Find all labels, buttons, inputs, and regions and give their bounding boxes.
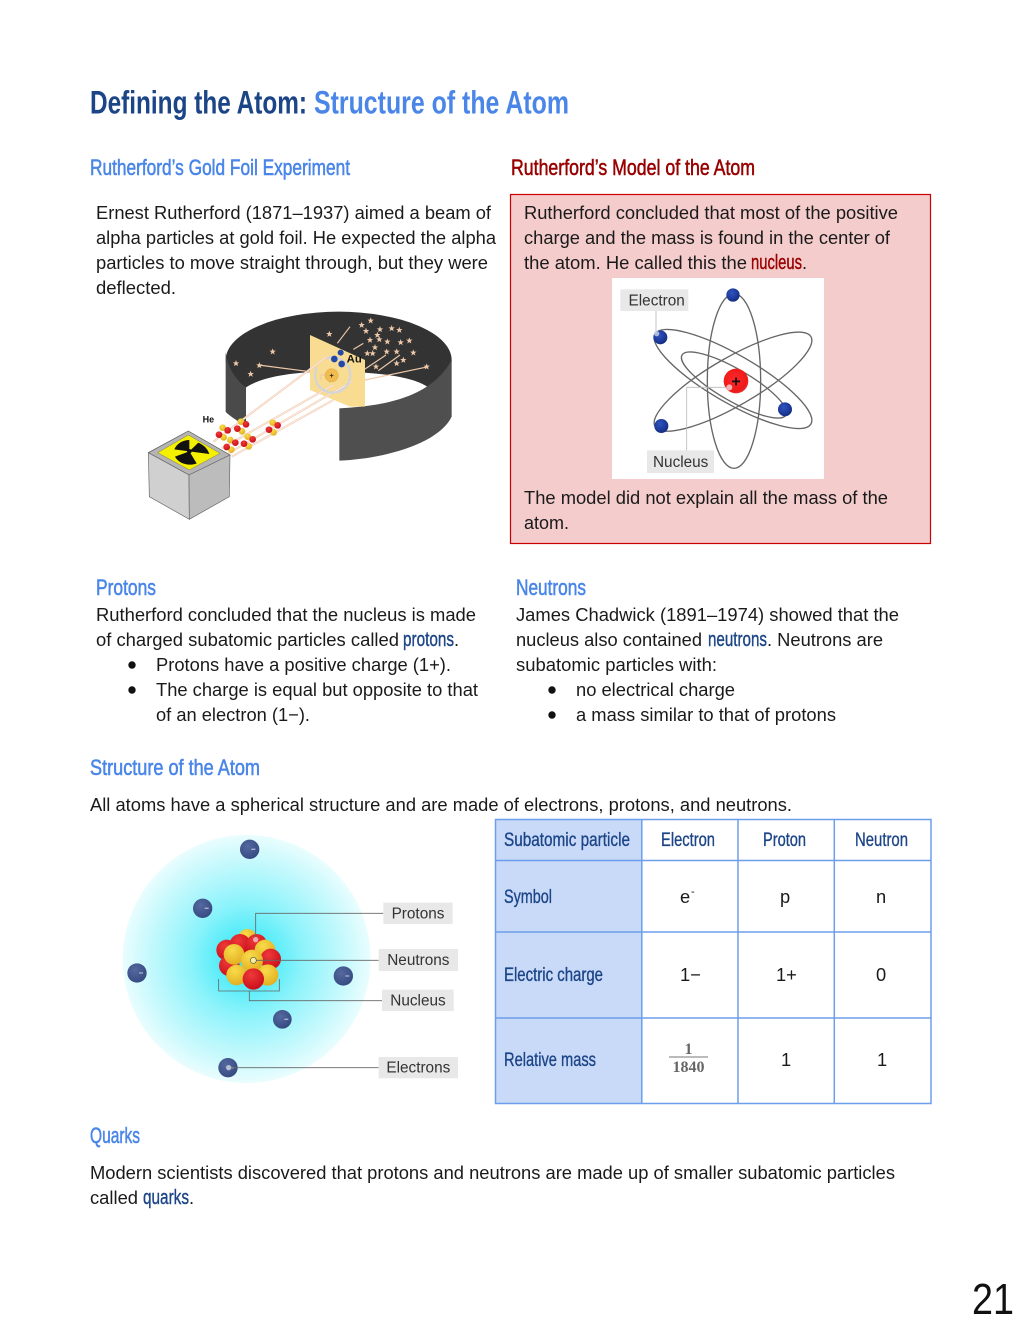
table header row: Subatomic particle [504,829,630,851]
panel text: limitation: atom. [524,512,569,533]
scattered stars [233,317,430,377]
panel: Rutherford's model [510,194,930,544]
text: neutrons intro [516,604,899,675]
text: quarks [90,1162,895,1209]
text: neutrons intro: . Neutrons are [767,629,883,650]
label: Nucleus: Nucleus [390,992,446,1009]
label: Protons [383,903,453,924]
row: electric charge: 1+ [776,964,797,985]
label: Nucleus: Nucleus [653,454,709,471]
text: quarks: called [90,1187,138,1208]
section: protons [96,575,478,725]
text block: gold foil experiment: Ernest Rutherford (1871–1937) aimed a beam of [96,202,492,223]
label: Electrons [379,1057,458,1078]
label: Au: Au [347,354,362,366]
row: electric charge: Electric charge [504,964,603,986]
row: relative mass: Relative mass [504,1049,596,1071]
row: electric charge: 0 [876,964,886,985]
row: relative mass: 1 [877,1049,887,1070]
gold nucleus [325,369,338,382]
bullet list: neutrons: no electrical charge [576,679,735,700]
table header row: Neutron [855,829,908,851]
alpha particles [216,418,281,453]
table header row: Electron [661,829,715,851]
right wall of the screen [339,360,452,461]
text: protons intro: protons [403,628,454,651]
nucleus with plus sign [724,369,748,393]
orbits [643,294,823,468]
nucleus cluster [216,929,281,990]
electron cloud [123,835,371,1083]
row: relative mass: 1 [781,1049,791,1070]
row: electric charge: 1− [680,964,701,985]
table header row [504,829,908,851]
table: subatomic particles [496,820,931,1104]
bullet list: protons [128,654,478,725]
bullet list: protons: The charge is equal but opposite to that [156,679,478,700]
text block: gold foil experiment: alpha particles at gold foil. He expected the alpha [96,227,497,248]
row: relative mass [504,1041,887,1076]
text block: gold foil experiment: deflected. [96,277,176,298]
label: Electron: Electron [629,292,685,309]
table grid [496,820,931,1104]
alpha particle tracks [213,327,428,457]
text: neutrons intro: neutrons [708,628,767,651]
panel text: conclusion: the atom. He called this the [524,252,747,273]
text: protons intro [96,604,476,651]
section: neutrons [516,575,899,725]
title: Structure of the Atom [314,84,569,120]
bullet list: protons: of an electron (1−). [156,704,310,725]
text: quarks: quarks [143,1186,189,1209]
row: electric charge [504,964,886,986]
label: Neutrons: Neutrons [387,952,450,969]
illustration: gold foil experiment [148,312,452,519]
panel text: limitation [524,487,888,533]
atom model diagram: + [731,374,741,391]
panel text: conclusion: nucleus [751,251,802,274]
left wall of the screen [226,352,246,426]
text block: gold foil experiment [96,202,497,298]
leader lines [656,308,729,451]
electrons [653,288,792,433]
label: Neutrons [379,949,458,971]
heading: model of the atom: Rutherford’s Model of the Atom [511,155,755,180]
fraction: 1/1840: 1840 [672,1059,704,1076]
text: structure intro: All atoms have a spherical structure and are made of electrons, protons, and neutrons. [90,794,792,815]
text: quarks: . [189,1187,194,1208]
electron orbit [315,357,350,393]
label: Electrons: Electrons [386,1059,451,1076]
bullet list: neutrons [548,679,836,725]
text: protons intro: Rutherford concluded that the nucleus is made [96,604,476,625]
text: neutrons intro: subatomic particles with: [516,654,717,675]
label: Electron [620,289,688,311]
label: Protons: Protons [392,905,445,922]
panel text: conclusion: . [802,252,807,273]
text: protons intro: . [454,629,459,650]
bullet list: neutrons: a mass similar to that of protons [576,704,836,725]
text: neutrons intro: nucleus also contained [516,629,702,650]
row: symbol [504,886,886,908]
bullet list: protons: Protons have a positive charge (1+). [156,654,451,675]
label: Nucleus [647,450,714,473]
label: He: He [203,415,214,425]
text: quarks: Modern scientists discovered that protons and neutrons are made up of smaller subatomic particles [90,1162,895,1183]
heading: gold foil experiment: Rutherford’s Gold Foil Experiment [90,155,350,180]
radioactive source box [148,431,230,519]
gold foil sheet [310,335,365,407]
row: symbol: - [691,886,695,898]
row: symbol: Symbol [504,886,552,908]
heading: structure of the atom: Structure of the Atom [90,755,260,780]
atom structure diagram [123,835,458,1083]
text: neutrons intro: James Chadwick (1891–1974) showed that the [516,604,899,625]
panel text: conclusion: Rutherford concluded that most of the positive [524,202,898,223]
row: symbol: p [780,886,790,907]
fraction: 1/1840 [669,1041,708,1076]
fraction: 1/1840: 1 [684,1041,692,1058]
text: protons intro: of charged subatomic particles called [96,629,399,650]
label: Nucleus [382,990,454,1011]
panel text: limitation: The model did not explain all the mass of the [524,487,888,508]
panel text: conclusion: charge and the mass is found in the center of [524,227,891,248]
atom model diagram [612,278,824,479]
electrons [127,840,353,1077]
title [90,84,569,120]
heading: protons: Protons [96,575,156,600]
title: Defining the Atom: [90,84,307,120]
row: symbol: e [680,886,690,907]
illustration: gold foil experiment: + [330,371,334,380]
text block: gold foil experiment: particles to move straight through, but they were [96,252,488,273]
heading: quarks: Quarks [90,1123,140,1148]
panel text: conclusion [524,202,898,274]
table header row: Proton [763,829,806,851]
leader lines [219,913,383,1068]
row: symbol: n [876,886,886,907]
heading: neutrons: Neutrons [516,575,586,600]
